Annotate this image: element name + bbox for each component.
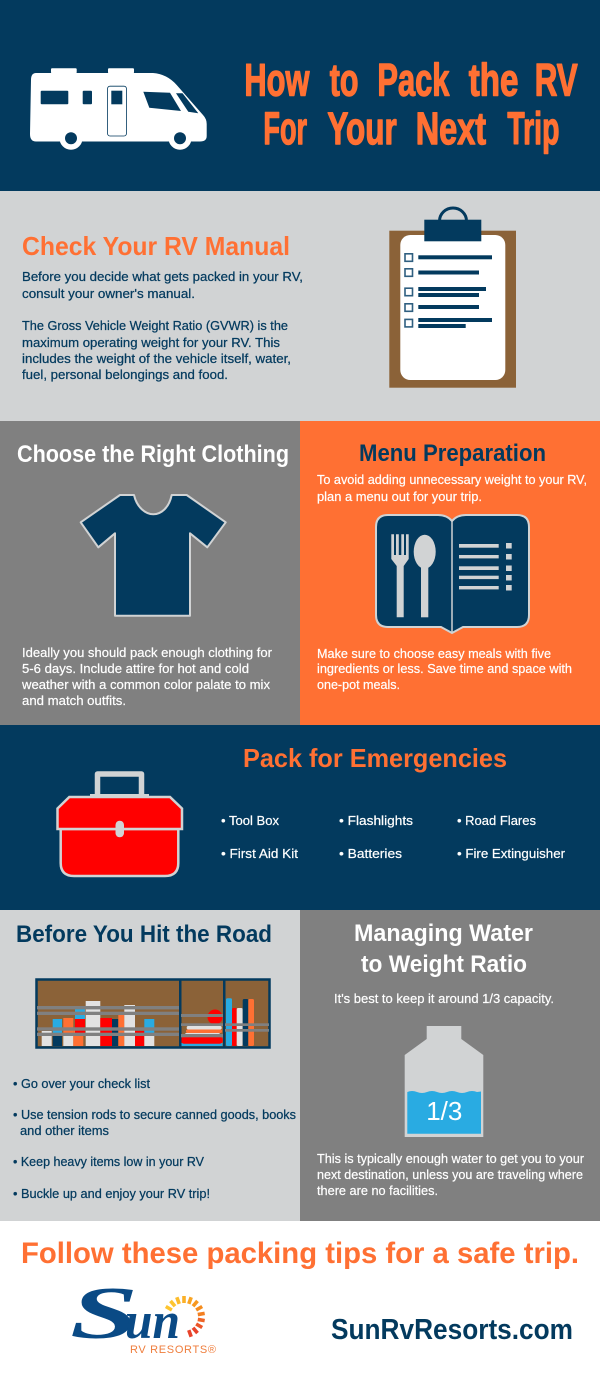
heading: Pack for Emergencies [243, 743, 507, 773]
emergency item list: • First Aid Kit [221, 846, 298, 861]
text block: tips: ingredients or less. Save time and space with [317, 661, 572, 676]
checklist: • Buckle up and enjoy your RV trip! [13, 1186, 210, 1201]
icon: water bottle at one third: 1/3 [426, 1096, 462, 1126]
text block: Before you decide what gets packed in your RV, [22, 269, 303, 284]
heading: to Weight Ratio [361, 951, 527, 978]
icon: toolbox [58, 774, 182, 876]
text block: intro: plan a menu out for your trip. [317, 489, 482, 504]
website: SunRvResorts.com [331, 1314, 573, 1346]
heading: Before You Hit the Road [16, 921, 272, 948]
icon: menu with fork and spoon [376, 515, 529, 633]
checklist [13, 1076, 296, 1201]
text block: maximum operating weight for your RV. This [22, 335, 280, 350]
emergency item list: • Fire Extinguisher [457, 846, 566, 861]
text block: weather with a common color palate to mix [21, 677, 270, 692]
text block: destination: This is typically enough water to get you to your [317, 1151, 585, 1166]
panel: pack for emergencies [0, 725, 600, 910]
title: Your [327, 103, 397, 154]
checklist: and other items [20, 1123, 109, 1138]
title: Trip [507, 103, 559, 154]
title: to [330, 54, 358, 106]
text block: intro: To avoid adding unnecessary weight to your RV, [317, 472, 587, 487]
panel: header [0, 0, 600, 191]
logo: Sun RV Resorts: un [125, 1293, 180, 1350]
heading [354, 920, 533, 978]
panel: menu preparation [300, 421, 600, 725]
heading: Menu Preparation [359, 440, 546, 467]
panel: managing water to weight ratio [300, 910, 600, 1221]
title: For [263, 103, 307, 154]
text block: destination: next destination, unless you are traveling where [317, 1167, 583, 1182]
icon: water bottle at one third [405, 1026, 483, 1137]
text block: The Gross Vehicle Weight Ratio (GVWR) is the [22, 318, 288, 333]
logo: Sun RV Resorts: RV RESORTS® [130, 1344, 216, 1356]
panel: check your RV manual [0, 191, 600, 421]
text block [21, 645, 273, 708]
text block [22, 269, 303, 382]
heading: Choose the Right Clothing [17, 441, 289, 468]
checklist: • Use tension rods to secure canned goods, books [13, 1107, 296, 1122]
logo: Sun RV Resorts: S [70, 1273, 138, 1355]
checklist: • Go over your check list [13, 1076, 150, 1091]
text block: intro [317, 472, 587, 504]
emergency item list: • Flashlights [339, 813, 414, 828]
text block: tips: Make sure to choose easy meals with five [317, 646, 551, 661]
icon: RV [30, 68, 207, 150]
logo: Sun RV Resorts [70, 1273, 216, 1356]
title [244, 54, 578, 154]
text block: includes the weight of the vehicle itself, water, [22, 351, 291, 366]
panel: footer [0, 1221, 600, 1376]
heading: Check Your RV Manual [22, 231, 290, 261]
text block: destination [317, 1151, 585, 1198]
title: How [244, 54, 310, 106]
text block: capacity: It's best to keep it around 1/3 capacity. [334, 991, 554, 1006]
title: Pack [377, 54, 450, 106]
emergency item list [221, 813, 566, 861]
text block: Ideally you should pack enough clothing for [22, 645, 273, 660]
icon: clipboard [389, 208, 516, 388]
title: RV [535, 54, 578, 106]
heading: Managing Water [354, 920, 533, 947]
text block: 5-6 days. Include attire for hot and cold [22, 661, 249, 676]
closing message: Follow these packing tips for a safe trip. [21, 1237, 579, 1270]
icon: t-shirt [81, 495, 226, 616]
icon: shelves secured with tension rods [36, 979, 270, 1048]
text block: tips: one-pot meals. [317, 677, 400, 692]
emergency item list: • Road Flares [457, 813, 536, 828]
title: the [469, 54, 518, 106]
text block: and match outfits. [22, 693, 126, 708]
text block: consult your owner's manual. [22, 286, 195, 301]
emergency item list: • Batteries [339, 846, 403, 861]
text block: destination: there are no facilities. [317, 1183, 438, 1198]
panel: choose the right clothing [0, 421, 300, 725]
checklist: • Keep heavy items low in your RV [13, 1154, 204, 1169]
text block: tips [317, 646, 572, 692]
emergency item list: • Tool Box [221, 813, 279, 828]
text block: fuel, personal belongings and food. [22, 367, 228, 382]
panel: before you hit the road [0, 910, 300, 1221]
title: Next [416, 103, 486, 154]
